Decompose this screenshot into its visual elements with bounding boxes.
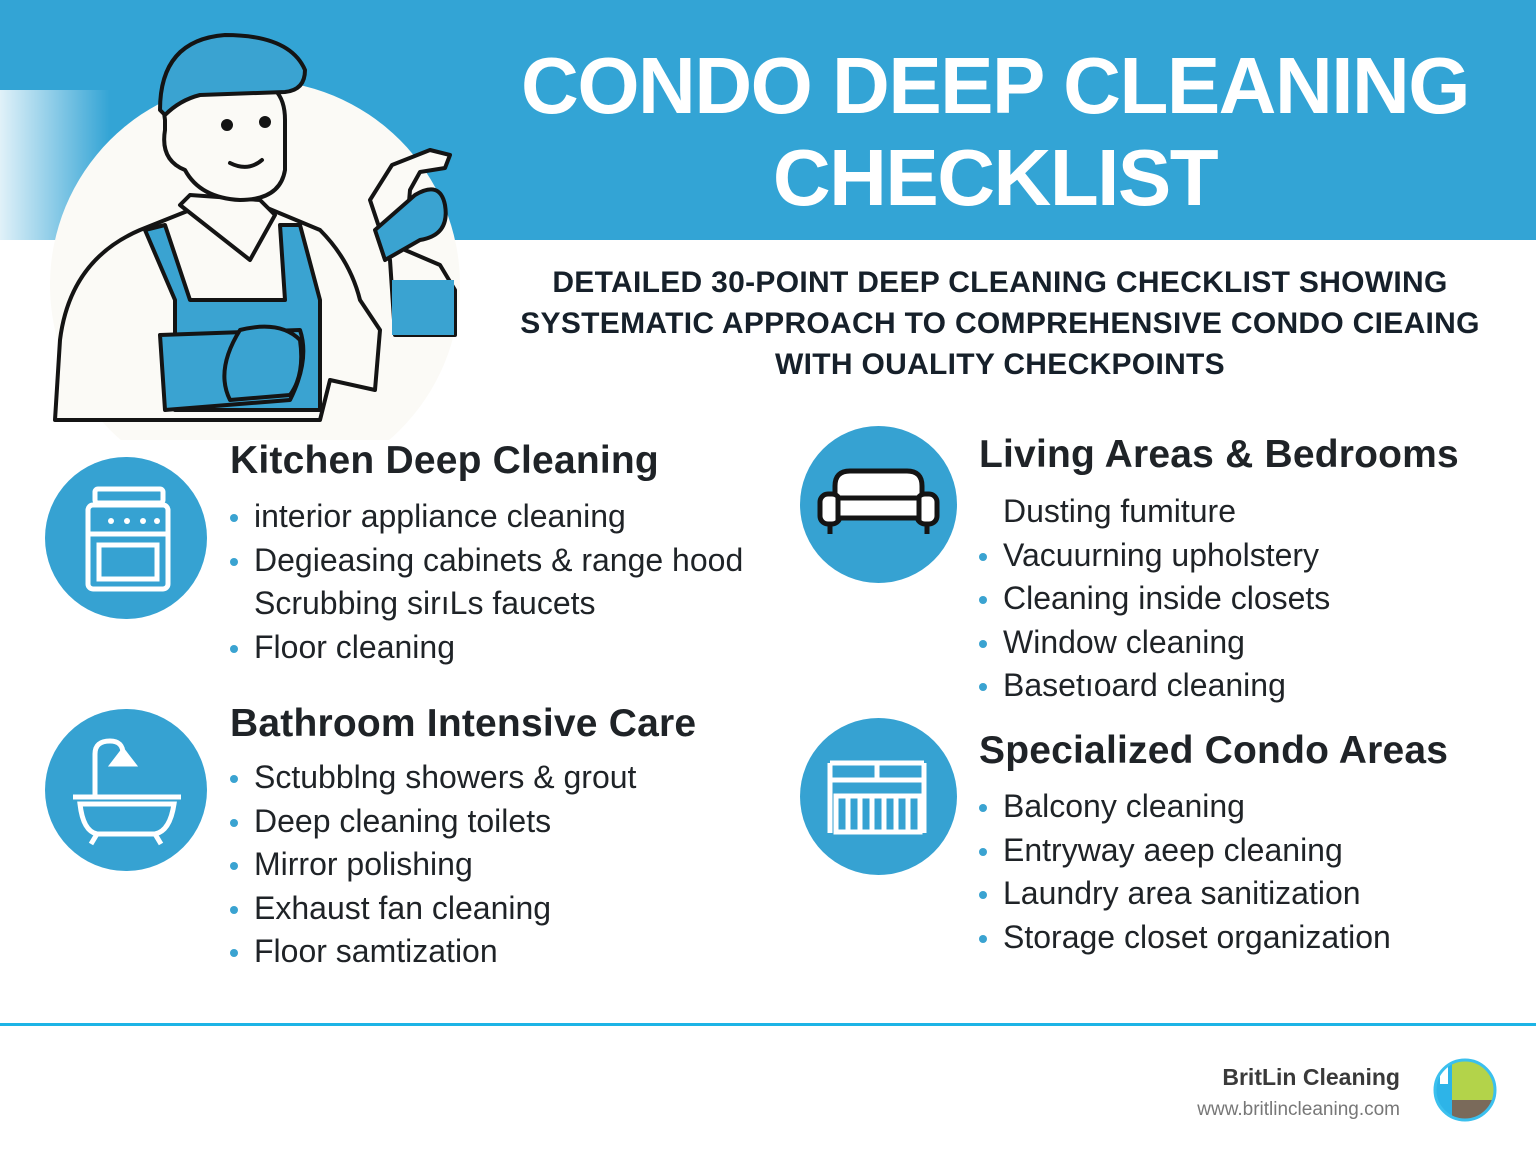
- footer brand: www.britlincleaning.com: [1197, 1099, 1400, 1120]
- items: Window cleaning: [1003, 624, 1245, 660]
- items: [230, 759, 636, 969]
- panel: bathroom: [45, 702, 696, 969]
- heading: Kitchen Deep Cleaning: [230, 439, 659, 482]
- items: Vacuurning upholstery: [1003, 536, 1319, 572]
- left fade: [0, 90, 110, 240]
- items: [230, 498, 743, 664]
- heading: Specialized Condo Areas: [979, 729, 1448, 772]
- title: CONDO DEEP CLEANING: [521, 41, 1469, 130]
- footer brand: [1197, 1064, 1400, 1120]
- header band: [0, 0, 1536, 240]
- items: interior appliance cleaning: [254, 498, 626, 534]
- subtitle: SYSTEMATIC APPROACH TO COMPREHENSIVE CONDO CIEAING: [520, 307, 1480, 340]
- panel: living areas: [800, 426, 1459, 703]
- items: Floor cleaning: [254, 628, 455, 664]
- heading: Living Areas & Bedrooms: [979, 433, 1459, 476]
- logo: [1434, 1058, 1496, 1122]
- icon: oven: [45, 457, 207, 619]
- items: Laundry area sanitization: [1003, 875, 1361, 911]
- illustration: cleaner: [50, 33, 460, 440]
- items: Mirror polishing: [254, 846, 473, 882]
- items: Cleaning inside closets: [1003, 580, 1330, 616]
- items: Scrubbing sirıLs faucets: [254, 585, 596, 621]
- footer brand: BritLin Cleaning: [1222, 1064, 1400, 1090]
- items: Degieasing cabinets & range hood: [254, 542, 743, 578]
- icon: sofa: [800, 426, 957, 583]
- icon: balcony railing: [800, 718, 957, 875]
- heading: Bathroom Intensive Care: [230, 702, 696, 745]
- items: Floor samtization: [254, 933, 498, 969]
- items: Storage closet organization: [1003, 918, 1391, 954]
- title: [521, 41, 1469, 222]
- items: Basetıoard cleaning: [1003, 667, 1286, 703]
- items: Balcony cleaning: [1003, 788, 1245, 824]
- items: Deep cleaning toilets: [254, 802, 551, 838]
- items: Entryway aeep cleaning: [1003, 832, 1343, 868]
- items: Exhaust fan cleaning: [254, 890, 551, 926]
- icon: bathtub: [45, 709, 207, 871]
- items: Dusting fumiture: [1003, 493, 1236, 529]
- items: [979, 493, 1330, 703]
- panel: kitchen: [45, 439, 743, 664]
- subtitle: WITH OUALITY CHECKPOINTS: [775, 348, 1225, 381]
- items: Sctubblng showers & grout: [254, 759, 636, 795]
- items: [979, 788, 1391, 954]
- title: CHECKLIST: [773, 133, 1217, 222]
- panel: specialized: [800, 718, 1448, 954]
- subtitle: DETAILED 30-POINT DEEP CLEANING CHECKLIST SHOWING: [552, 266, 1448, 299]
- subtitle: [520, 266, 1480, 381]
